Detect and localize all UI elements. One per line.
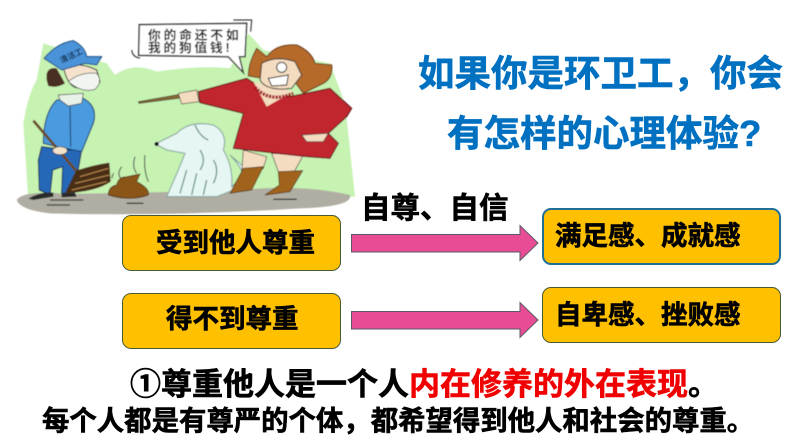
box: not respected (122, 293, 341, 349)
dog (155, 124, 245, 197)
poop (108, 155, 149, 198)
arrow: top (351, 224, 539, 262)
title question (418, 53, 783, 154)
speech bubble: 我的狗值钱! (148, 40, 230, 55)
broom (33, 121, 111, 193)
box: satisfaction and achievement: 满足感、成就感 (555, 221, 740, 251)
green background patch (23, 33, 355, 200)
speech bubble (132, 20, 252, 73)
worker (28, 41, 102, 200)
title question: 有怎样的心理体验? (447, 113, 761, 154)
conclusion line: ①尊重他人是一个人内在修养的外在表现。 (130, 367, 719, 402)
box: inferiority and frustration: 自卑感、挫败感 (555, 300, 740, 330)
box: respected by others (122, 215, 341, 271)
box: inferiority and frustration (542, 287, 781, 343)
ground (17, 188, 350, 214)
box: respected by others: 受到他人尊重 (156, 228, 315, 258)
woman (138, 45, 352, 195)
label: self-respect and confidence: 自尊、自信 (361, 192, 509, 225)
supporting sentence: 每个人都是有尊严的个体，都希望得到他人和社会的尊重。 (42, 405, 754, 436)
box: satisfaction and achievement (542, 208, 781, 265)
arrow: bottom (351, 302, 539, 338)
title question: 如果你是环卫工，你会 (418, 53, 783, 94)
worker: 清洁工 (58, 46, 84, 65)
box: not respected: 得不到尊重 (166, 304, 298, 334)
speech bubble: 你的命还不如 (148, 27, 239, 42)
illustration: sanitation worker insulted by woman with dog (16, 18, 356, 215)
